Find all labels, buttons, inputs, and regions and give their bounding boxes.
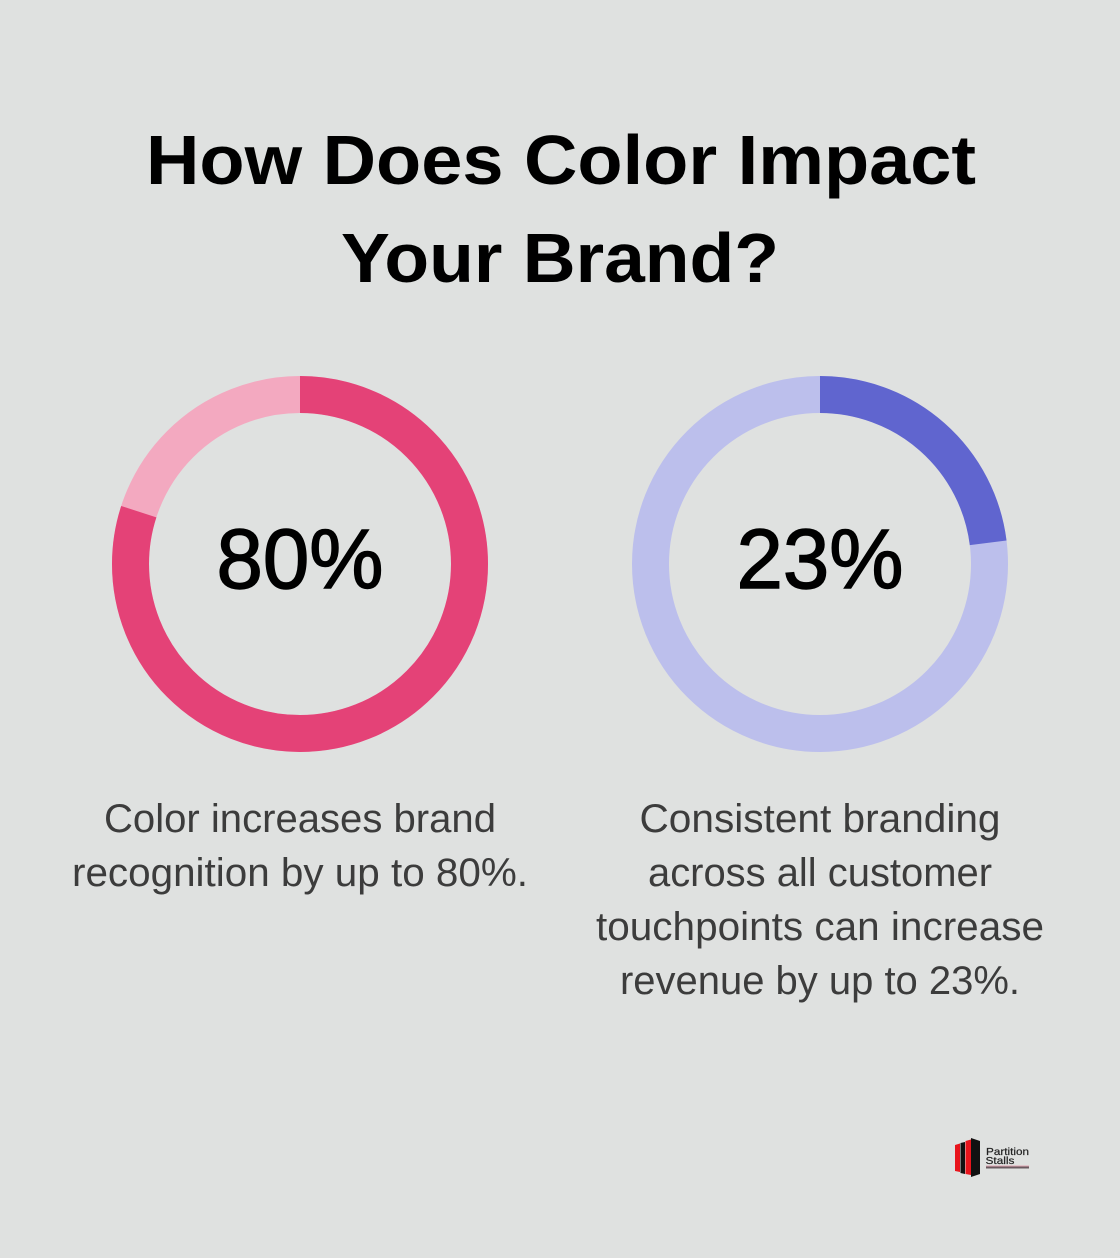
description: brand recognition: recognition by up to 80%. (72, 851, 528, 895)
stat value: 80%: 80% (216, 512, 384, 606)
description: consistent branding: revenue by up to 23%. (620, 959, 1020, 1003)
logo wordmark: Stalls (986, 1155, 1014, 1167)
description: brand recognition (72, 797, 528, 895)
description: consistent branding: Consistent branding (640, 797, 1000, 841)
logo wordmark (986, 1146, 1029, 1168)
panel: consistent branding (596, 394, 1044, 1003)
title (146, 121, 976, 297)
description: consistent branding: across all customer (648, 851, 992, 895)
stat value: 23%: 23% (736, 512, 904, 606)
donut chart: 80% (130, 394, 470, 734)
title: How Does Color Impact (146, 121, 976, 199)
description: brand recognition: Color increases brand (104, 797, 496, 841)
logo wordmark: Partition (986, 1146, 1029, 1158)
title: Your Brand? (341, 219, 779, 297)
panel: brand recognition (72, 394, 528, 895)
icon: partition panels (955, 1138, 980, 1177)
donut chart: 23% (650, 394, 990, 734)
description: consistent branding (596, 797, 1044, 1003)
logo: Partition Stalls (955, 1138, 1029, 1177)
description: consistent branding: touchpoints can increase (596, 905, 1044, 949)
